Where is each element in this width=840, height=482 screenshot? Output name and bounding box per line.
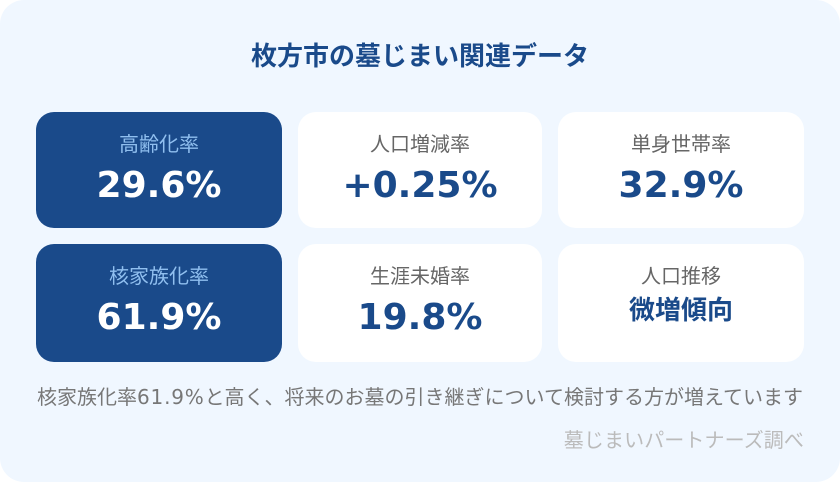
value: 29.6%: 29.6%	[97, 165, 221, 206]
source credit: 墓じまいパートナーズ調べ	[564, 428, 804, 452]
value: 微増傾向: 微増傾向	[629, 296, 733, 326]
card: 生涯未婚率	[298, 244, 542, 362]
label: 核家族化率: 核家族化率	[109, 264, 209, 288]
value: 32.9%: 32.9%	[619, 165, 743, 206]
card: 人口増減率	[298, 112, 542, 228]
label: 人口推移: 人口推移	[641, 264, 721, 288]
card: 単身世帯率	[558, 112, 804, 228]
label: 生涯未婚率: 生涯未婚率	[370, 264, 470, 288]
value: 19.8%: 19.8%	[358, 297, 482, 338]
value: 61.9%: 61.9%	[97, 297, 221, 338]
label: 単身世帯率: 単身世帯率	[631, 132, 731, 156]
label: 人口増減率: 人口増減率	[370, 132, 470, 156]
card: 人口推移	[558, 244, 804, 362]
value: +0.25%: +0.25%	[342, 165, 498, 206]
card: 高齢化率	[36, 112, 282, 228]
note text: 核家族化率61.9%と高く、将来のお墓の引き継ぎについて検討する方が増えています	[37, 385, 803, 409]
card: 核家族化率	[36, 244, 282, 362]
title: 枚方市の墓じまい関連データ	[251, 42, 589, 72]
label: 高齢化率: 高齢化率	[119, 132, 199, 156]
